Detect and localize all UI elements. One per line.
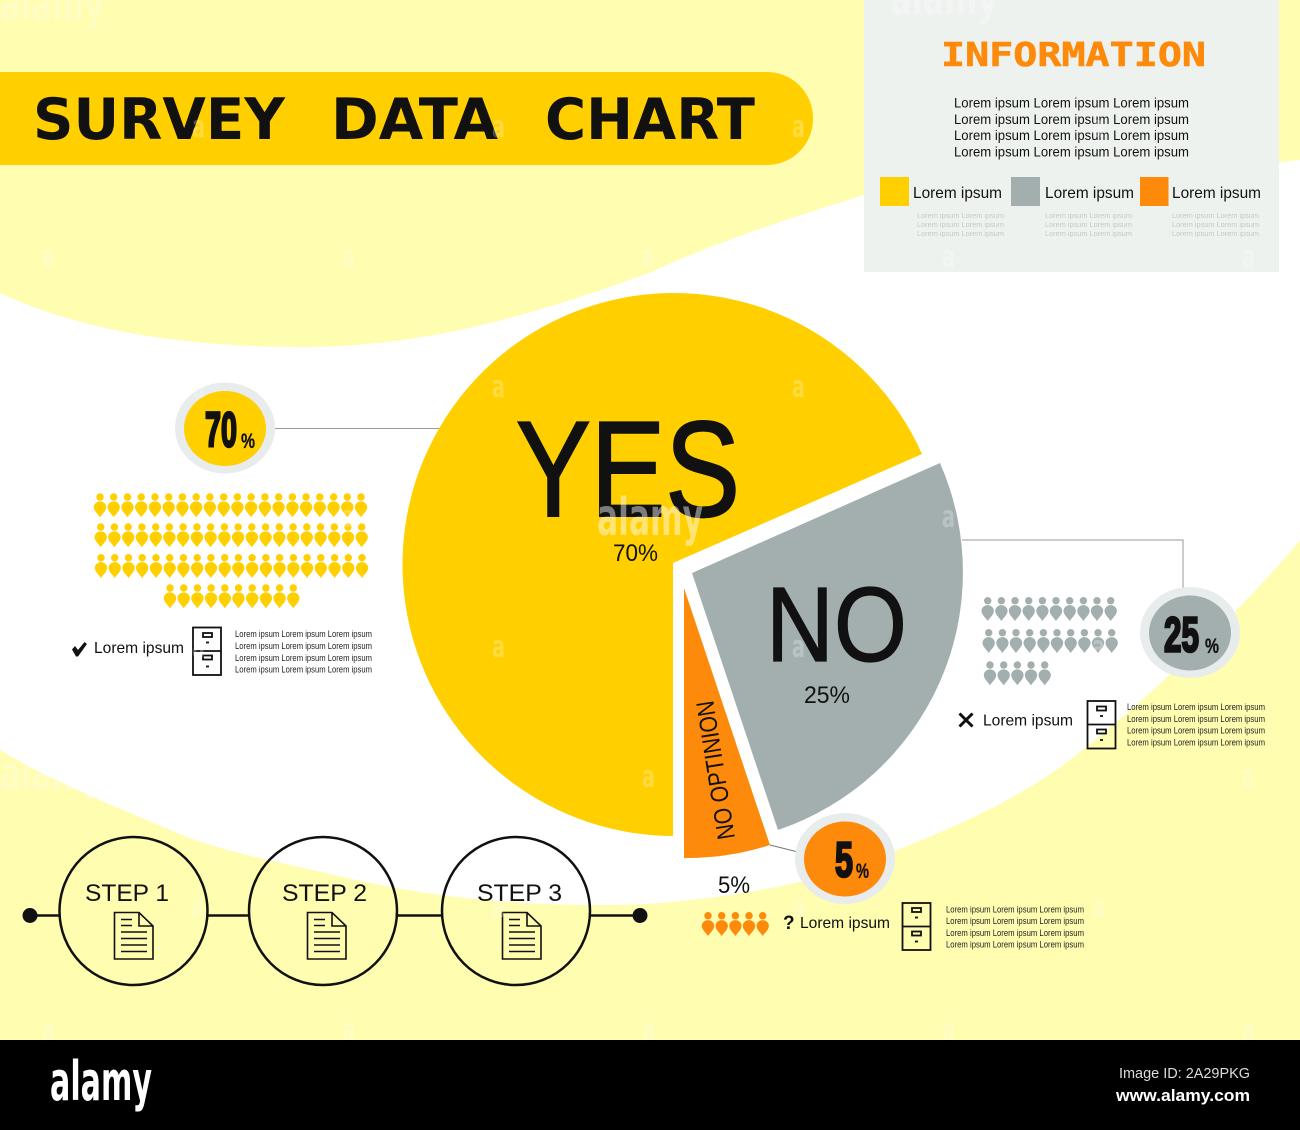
watermark: a [1242,240,1255,275]
note text: Lorem ipsum Lorem ipsum Lorem ipsum [946,916,1084,927]
watermark: a [492,110,505,145]
timeline segment lines [30,914,640,917]
badge: 70 percent: 70 [205,404,237,458]
legend: no [1011,177,1134,238]
icon: cross [960,714,972,726]
watermark: a [492,370,505,405]
step 2: STEP 2 [282,880,367,907]
footer logo: alamy [50,1050,152,1113]
title text: DATA [331,87,498,153]
icon: document [114,912,153,959]
title text: SURVEY [33,87,286,153]
yes percent: 70% [613,540,658,567]
watermark: a [42,1013,55,1048]
image id: Image ID: 2A29PKG [1119,1065,1250,1082]
connector: yes [275,428,440,430]
pie chart [403,293,963,858]
panel: information [864,0,1279,272]
watermark: alamy [597,488,703,548]
watermark: a [192,890,205,925]
title text: CHART [545,87,755,153]
note text: Lorem ipsum Lorem ipsum Lorem ipsum [1127,726,1265,736]
people icons: yes [94,493,368,608]
watermark: a [1242,760,1255,795]
legend: no opinion: Lorem ipsum Lorem ipsum [1172,213,1259,220]
legend: no: Lorem ipsum Lorem ipsum [1045,222,1132,229]
people icons: no [982,597,1118,685]
legend: yes [880,177,1004,238]
badge: 5 percent: % [856,860,869,883]
legend: no opinion: Lorem ipsum Lorem ipsum [1172,222,1259,229]
watermark: a [1092,890,1105,925]
note text [1127,702,1265,748]
icon: file cabinet [193,628,221,675]
people icons: no opinion [702,912,769,936]
watermark: a [1092,110,1105,145]
legend: yes: Lorem ipsum Lorem ipsum [917,222,1004,229]
no percent: 25% [804,682,850,709]
badge: 5 percent: 5 [835,834,853,888]
legend: no opinion [1140,177,1261,238]
footer bar [0,1040,1300,1130]
watermark: a [192,630,205,665]
badge: 70 percent [175,382,275,474]
note label: Lorem ipsum [800,915,890,932]
timeline start dot [22,908,38,923]
note text: Lorem ipsum Lorem ipsum Lorem ipsum [1127,738,1265,748]
icon: document [308,912,346,959]
legend: yes: Lorem ipsum Lorem ipsum [917,231,1004,238]
timeline end dot [632,908,648,923]
legend: yes: Lorem ipsum Lorem ipsum [917,213,1004,220]
watermark: a [1242,500,1255,535]
watermark: a [1092,370,1105,405]
background: white wave band [0,160,1300,905]
watermark: a [42,240,55,275]
watermark: a [942,1013,955,1048]
note text: Lorem ipsum Lorem ipsum Lorem ipsum [235,653,372,664]
watermark: a [342,1013,355,1048]
connector: no opinion [770,845,798,852]
watermark: a [792,890,805,925]
note: no opinion [783,903,1084,950]
yes label: YES [516,393,740,545]
step 3 [442,837,590,985]
watermark: a [342,240,355,275]
pie slice: no opinion [684,588,770,858]
title text [33,87,755,153]
steps timeline [22,837,648,985]
legend: no opinion: Lorem ipsum Lorem ipsum [1172,231,1259,238]
icon: file cabinet [1088,701,1116,748]
information body text: Lorem ipsum Lorem ipsum Lorem ipsum [954,96,1189,110]
watermark: a [1242,1013,1255,1048]
note text: Lorem ipsum Lorem ipsum Lorem ipsum [946,940,1084,950]
information body text: Lorem ipsum Lorem ipsum Lorem ipsum [954,112,1189,127]
note label: Lorem ipsum [94,640,184,657]
watermark: a [192,110,205,145]
badge: 25 percent: % [1205,635,1219,658]
watermark: a [492,630,505,665]
watermark: a [342,760,355,795]
note text: Lorem ipsum Lorem ipsum Lorem ipsum [946,904,1084,916]
legend: no: Lorem ipsum [1045,185,1134,202]
watermark: a [1092,630,1105,665]
website: www.alamy.com [1115,1086,1250,1105]
watermark: a [792,110,805,145]
information heading: INFORMATION [941,35,1206,74]
step 2 [249,837,397,985]
icon: file cabinet [902,903,930,950]
note text: Lorem ipsum Lorem ipsum Lorem ipsum [1127,702,1265,713]
legend: no opinion: Lorem ipsum [1172,185,1261,202]
note label: Lorem ipsum [983,712,1073,730]
watermark: alamy [0,746,104,802]
watermark: a [792,370,805,405]
watermark: a [942,500,955,535]
no label: NO [766,566,907,684]
icon: question mark: ? [783,913,795,934]
note text: Lorem ipsum Lorem ipsum Lorem ipsum [946,928,1084,939]
note text: Lorem ipsum Lorem ipsum Lorem ipsum [235,629,372,640]
icon: document [502,912,541,959]
legend: yes: Lorem ipsum [913,185,1002,202]
no opinion label: NO OPTINION [691,699,741,841]
note text: Lorem ipsum Lorem ipsum Lorem ipsum [235,664,372,676]
connector: no [962,540,1183,588]
watermark: a [642,240,655,275]
note: yes [72,628,372,676]
note text [946,904,1084,950]
title banner [0,72,813,165]
legend: no: Lorem ipsum Lorem ipsum [1045,213,1132,220]
icon: check mark [72,642,87,656]
step 1: STEP 1 [85,880,169,907]
note text [235,629,372,676]
information body text: Lorem ipsum Lorem ipsum Lorem ipsum [954,128,1189,143]
step 3: STEP 3 [477,880,562,907]
information body text: Lorem ipsum Lorem ipsum Lorem ipsum [954,144,1189,160]
watermark: a [42,500,55,535]
note text: Lorem ipsum Lorem ipsum Lorem ipsum [235,641,372,652]
watermark: a [342,500,355,535]
watermark: a [492,890,505,925]
badge: 25 percent: 25 [1164,608,1199,662]
step 1 [60,837,208,985]
pie slice: no [692,463,963,830]
legend: no: Lorem ipsum Lorem ipsum [1045,231,1132,238]
watermark: a [642,760,655,795]
watermark: a [942,760,955,795]
badge: 5 percent [795,813,895,904]
pie slice: yes [403,293,922,836]
watermark: a [942,240,955,275]
watermark: a [192,370,205,405]
badge: 70 percent: % [241,430,255,453]
note: no [960,701,1265,748]
watermark: a [792,630,805,665]
watermark: a [642,1013,655,1048]
note text: Lorem ipsum Lorem ipsum Lorem ipsum [1127,714,1265,725]
information body text [954,96,1189,160]
badge: 25 percent [1140,587,1240,678]
5 percent caption: 5% [718,872,750,899]
